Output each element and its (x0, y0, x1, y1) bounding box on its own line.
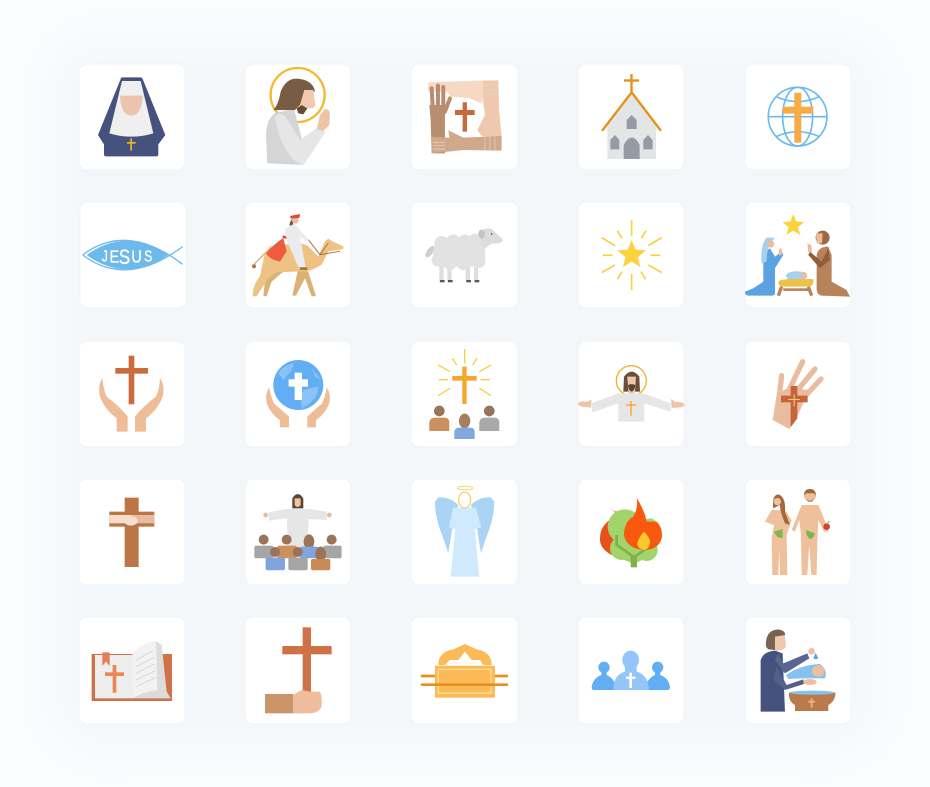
panel: Jesus with crowd (245, 479, 351, 585)
icon: hand with cross (773, 362, 821, 429)
panel: nativity (745, 202, 851, 308)
panel: group with cross (578, 617, 684, 724)
icon: rider on camel (252, 214, 343, 296)
icon: Adam and Eve (765, 489, 830, 575)
panel: joined hands with cross (411, 64, 518, 170)
icon: congregation under shining cross (429, 349, 499, 439)
panel: angel (411, 479, 518, 585)
fish lettering: U (131, 247, 142, 267)
panel: Jesus with open arms (577, 341, 685, 447)
icon: baptism (761, 629, 836, 712)
icon: Jesus with open arms (577, 366, 685, 422)
panel: praying Jesus (245, 64, 351, 170)
panel: hands holding cross (79, 341, 185, 447)
icon: hands holding globe (266, 360, 330, 427)
icon: nativity (745, 214, 850, 297)
icon: Bible (92, 641, 172, 701)
fish lettering: J (102, 247, 108, 265)
icon: Jesus with crowd (254, 494, 342, 570)
panel: ark of the covenant (411, 617, 518, 724)
panel: sheep (411, 202, 518, 308)
icon: nun (98, 77, 165, 156)
panel: burning bush (578, 479, 684, 585)
panel: hand raising cross (245, 617, 351, 724)
panel: cross with handshake (79, 479, 185, 585)
icon: joined hands with cross (428, 80, 502, 153)
panel: congregation under shining cross (411, 341, 518, 447)
panel: Adam and Eve (745, 479, 851, 585)
icon: hand raising cross (265, 627, 332, 713)
icon: Jesus fish (83, 240, 183, 270)
fish lettering: S (119, 246, 130, 270)
panel: hand with cross (745, 341, 851, 447)
fish lettering: E (109, 247, 119, 267)
icon: church (603, 74, 660, 159)
icon: shining star (602, 220, 662, 290)
icon: group with cross (592, 651, 670, 690)
icon: praying Jesus (266, 68, 330, 166)
panel: globe with cross (745, 64, 851, 170)
icon: cross with handshake (109, 498, 154, 567)
icon: burning bush (600, 498, 662, 567)
panel: hands holding globe (245, 341, 351, 447)
panel: baptism (745, 617, 851, 724)
panel: Bible (79, 617, 185, 724)
icon: globe with cross (768, 87, 827, 146)
icon: ark of the covenant (421, 644, 508, 698)
icon: hands holding cross (99, 356, 164, 432)
panel: nun (79, 64, 185, 170)
panel: church (578, 64, 684, 170)
panel: Jesus fish (80, 202, 186, 308)
icon: sheep (424, 228, 503, 282)
panel: shining star (578, 202, 684, 308)
fish lettering: S (144, 247, 152, 265)
panel: rider on camel (245, 202, 351, 308)
icon: angel (435, 486, 494, 577)
